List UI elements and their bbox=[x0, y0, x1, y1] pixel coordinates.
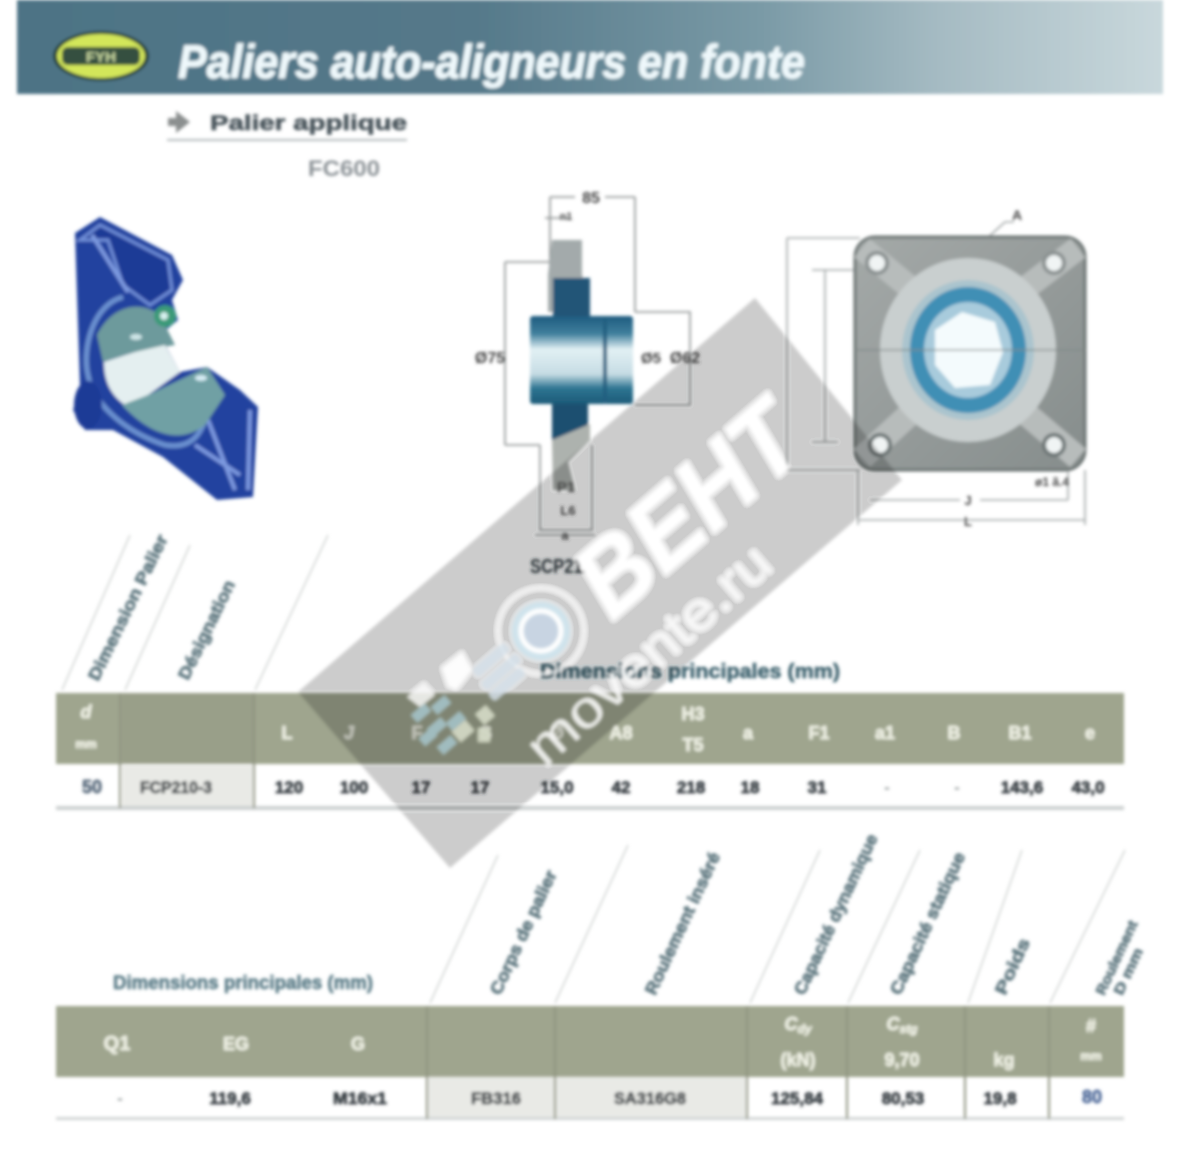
table 1 values: 50 bbox=[82, 777, 102, 797]
table 2 values: FB316 bbox=[471, 1089, 521, 1108]
table 1 header labels: e bbox=[1085, 723, 1095, 743]
table 2 header labels: EG bbox=[223, 1034, 249, 1054]
table 1 values: 15,0 bbox=[540, 778, 574, 797]
table 2 header labels: C bbox=[784, 1014, 797, 1034]
table 1 header labels: L bbox=[282, 723, 292, 743]
table 2 header labels bbox=[104, 1014, 1102, 1070]
technical drawing: side view: n1 bbox=[560, 211, 572, 223]
watermark domain: movente.ru bbox=[515, 533, 783, 777]
watermark logo: ring bbox=[498, 588, 584, 674]
technical drawing: side view: a bbox=[561, 528, 569, 543]
rotated column headers: table 2: Capacité dynamique bbox=[790, 831, 882, 998]
dimension lines bbox=[787, 222, 1085, 525]
watermark brand name: ВЕНТ bbox=[551, 375, 830, 639]
table 1 header labels: S bbox=[480, 723, 492, 743]
technical drawing: front view: A bbox=[1012, 207, 1022, 223]
table 1 values bbox=[82, 777, 1105, 797]
table 1 header labels: B bbox=[948, 723, 960, 743]
table 2 values: M16x1 bbox=[333, 1089, 387, 1108]
dividers bbox=[62, 535, 328, 690]
rotated column headers: table 1: Désignation bbox=[175, 577, 239, 683]
table 2 header labels: Q1 bbox=[104, 1033, 130, 1055]
table 2 header labels: mm bbox=[1080, 1049, 1102, 1063]
table 1 header labels: mm bbox=[75, 737, 97, 751]
icon: arrow bbox=[168, 111, 190, 133]
table 1 header labels: F1 bbox=[808, 723, 830, 743]
table 1 values: FCP210-3 bbox=[140, 778, 212, 797]
technical drawing: side view: L6 bbox=[560, 503, 576, 518]
table 1 values: 218 bbox=[677, 778, 705, 797]
rotated column headers: table 2: Corps de palier bbox=[486, 867, 561, 998]
table 2 header labels: C bbox=[886, 1014, 900, 1034]
table 1 header labels: Ø bbox=[550, 723, 564, 743]
watermark panel bbox=[298, 298, 902, 868]
watermark logo: tiled M bbox=[407, 642, 526, 755]
technical drawing: side view: P1 bbox=[557, 479, 575, 496]
icon: brand logo bbox=[53, 31, 149, 81]
technical drawing: side view: Ø5 bbox=[641, 350, 661, 367]
technical drawing: front view: ø1 ã.4 bbox=[1035, 475, 1069, 489]
rotated column headers: table 2: Roulement inséré bbox=[641, 849, 724, 998]
table 1 header labels: A8 bbox=[609, 723, 633, 743]
title: Paliers auto-aligneurs en fonte bbox=[178, 35, 805, 88]
table 1 values: 31 bbox=[808, 778, 826, 797]
table 1 values: 17 bbox=[471, 778, 489, 797]
rotated column headers: table 2: Capacité statique bbox=[886, 849, 969, 998]
table 1 header labels: a bbox=[743, 723, 754, 743]
dimension lines bbox=[505, 197, 690, 535]
technical drawing: side view: 85 bbox=[582, 190, 600, 207]
table 1 values: 143,6 bbox=[1001, 778, 1043, 797]
table 1 header labels: B1 bbox=[1008, 723, 1032, 743]
rotated column headers: table 1: Dimension Palier bbox=[85, 531, 172, 684]
rotated column headers: table 2: D mm bbox=[1110, 945, 1146, 997]
table 2 values: 19,8 bbox=[983, 1089, 1017, 1108]
table 1 values: 100 bbox=[340, 778, 368, 797]
table 2 values bbox=[117, 1087, 1102, 1108]
rotated column headers: table 2: Roulement bbox=[1092, 918, 1141, 997]
table 2 values: 80,53 bbox=[882, 1089, 924, 1108]
table 2 values: 125,84 bbox=[771, 1089, 824, 1108]
table 1 header labels: J bbox=[344, 723, 355, 743]
table 1 values: 17 bbox=[412, 778, 430, 797]
technical drawing: side view: Ø75 bbox=[475, 350, 505, 367]
rotated column headers: table 2 bbox=[430, 831, 1146, 1003]
section heading: main dimensions, table 1: Dimensions principales (mm) bbox=[540, 661, 840, 683]
rotated column headers: table 2: Poids bbox=[991, 935, 1034, 998]
icon: brand logo: FYH bbox=[86, 49, 116, 66]
table 1: dimensions bbox=[56, 693, 1124, 810]
rotated column headers: table 1 bbox=[62, 531, 328, 690]
technical drawing: front view: L bbox=[964, 514, 972, 529]
technical drawing: front view: J bbox=[964, 493, 972, 508]
table 1 values: 120 bbox=[275, 778, 303, 797]
table 2 values: SA316G8 bbox=[614, 1089, 686, 1108]
table 1 header labels: T5 bbox=[682, 735, 704, 755]
table 1 values: 43,0 bbox=[1071, 778, 1105, 797]
technical drawing: front view bbox=[787, 207, 1085, 529]
table 2 values: 119,6 bbox=[209, 1089, 251, 1108]
table 2 header labels: stg bbox=[900, 1022, 918, 1036]
table 2 values: 80 bbox=[1082, 1087, 1102, 1107]
technical drawing: side view: SCP212 bbox=[530, 556, 592, 578]
table 2 header labels: 9,70 bbox=[884, 1050, 920, 1070]
table 1 values: - bbox=[954, 778, 960, 797]
table 2 header labels: dy bbox=[797, 1022, 813, 1036]
watermark bbox=[298, 298, 902, 868]
table 1 header labels: a1 bbox=[875, 723, 895, 743]
header band bbox=[17, 0, 1163, 94]
section heading: main dimensions, table 2: Dimensions principales (mm) bbox=[113, 973, 373, 994]
table 2 values: - bbox=[117, 1089, 123, 1108]
subheading: palier applique bbox=[167, 111, 407, 140]
table 1 values: 18 bbox=[741, 778, 759, 797]
table 2: specifications bbox=[56, 1006, 1124, 1120]
series code: FC600 bbox=[308, 156, 380, 181]
technical drawing: side view: Ø62 bbox=[670, 350, 700, 367]
illustration: blue cut-away bearing housing bbox=[73, 217, 258, 500]
dividers bbox=[430, 845, 1125, 1003]
table 2 header labels: kg bbox=[993, 1050, 1015, 1070]
table 1 header labels bbox=[75, 702, 1095, 755]
table 2 header labels: # bbox=[1086, 1016, 1096, 1036]
table 2 header labels: (kN) bbox=[780, 1050, 816, 1070]
technical drawing: side view bbox=[475, 190, 700, 578]
table 2 header labels: G bbox=[351, 1034, 365, 1054]
table 1 values: 42 bbox=[612, 778, 630, 797]
table 1 values: - bbox=[884, 778, 890, 797]
subheading: palier applique: Palier applique bbox=[210, 112, 407, 135]
table 1 header labels: F bbox=[412, 723, 422, 743]
table 1 header labels: d bbox=[80, 702, 92, 722]
table 1 header labels: H3 bbox=[681, 704, 705, 724]
